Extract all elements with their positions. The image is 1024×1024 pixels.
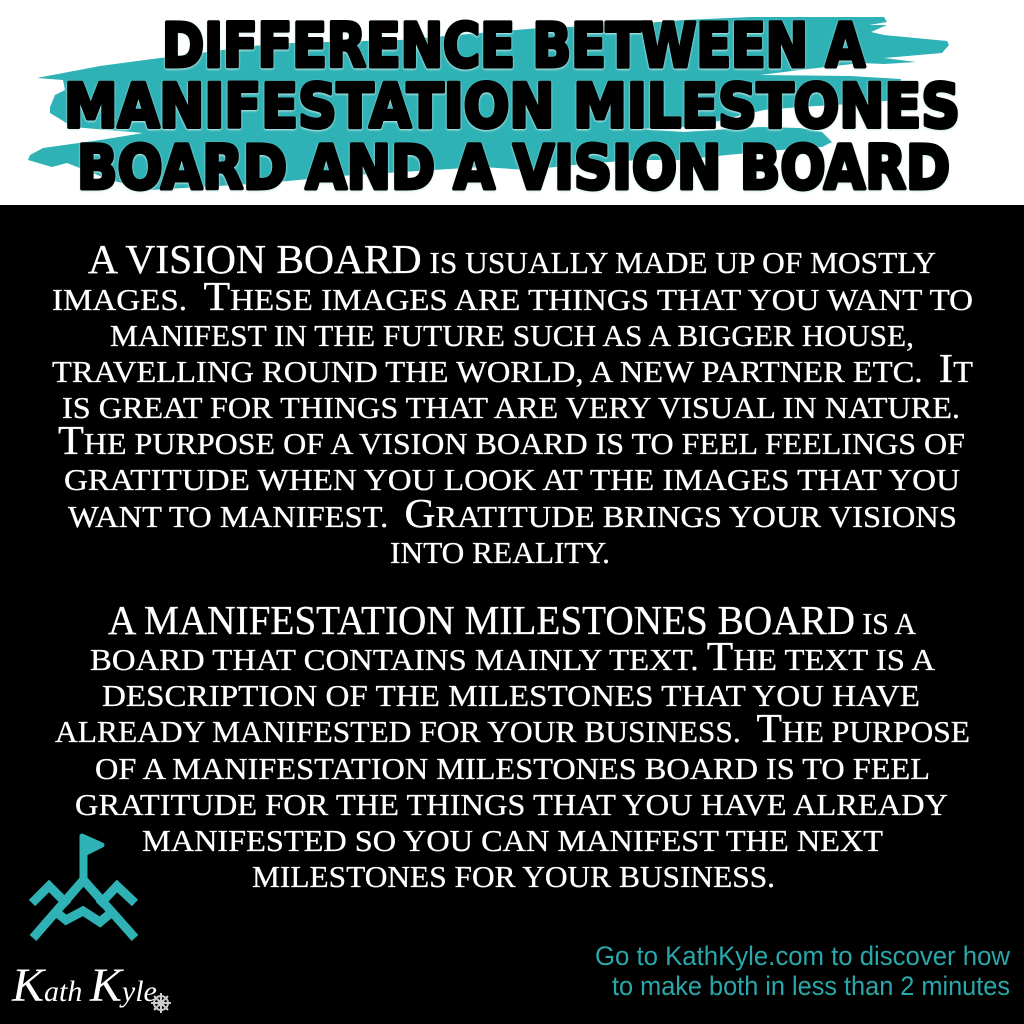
paragraph: manifestation milestones board: OF A MANIFESTATION MILESTONES BOARD IS TO FEEL — [95, 751, 930, 786]
paragraph: vision board: IMAGES. THESE IMAGES ARE THINGS THAT YOU WANT TO — [52, 273, 973, 319]
paragraph: manifestation milestones board: BOARD THAT CONTAINS MAINLY TEXT. THE TEXT IS A — [90, 633, 936, 679]
paragraph: vision board: GRATITUDE WHEN YOU LOOK AT THE IMAGES THAT YOU — [64, 462, 960, 497]
paragraph: vision board: MANIFEST IN THE FUTURE SUCH AS A BIGGER HOUSE, — [110, 318, 914, 353]
paragraph: vision board: IS GREAT FOR THINGS THAT ARE VERY VISUAL IN NATURE. — [62, 390, 960, 425]
paragraph: manifestation milestones board: GRATITUDE FOR THE THINGS THAT YOU HAVE ALREADY — [75, 787, 948, 822]
paragraph: manifestation milestones board: A MANIFESTATION MILESTONES BOARD IS A — [108, 597, 917, 643]
icon: snowflake mandala — [151, 993, 171, 1013]
paragraph: manifestation milestones board: MANIFESTED SO YOU CAN MANIFEST THE NEXT — [142, 823, 883, 858]
header panel — [0, 0, 1024, 206]
paragraph: vision board — [52, 236, 973, 570]
paragraph: manifestation milestones board: DESCRIPTION OF THE MILESTONES THAT YOU HAVE — [102, 678, 920, 713]
signature: Kath Kyle: Kath Kyle — [11, 959, 157, 1012]
black body panel — [0, 205, 1024, 1024]
title: DIFFERENCE BETWEEN A — [162, 10, 865, 82]
paragraph: vision board: A VISION BOARD IS USUALLY MADE UP OF MOSTLY — [88, 236, 936, 282]
icon: mountain with flag logo — [32, 836, 135, 938]
paragraph: manifestation milestones board: ALREADY MANIFESTED FOR YOUR BUSINESS. THE PURPOSE — [55, 705, 970, 751]
call to action — [595, 941, 1010, 1001]
call to action: Go to KathKyle.com to discover how — [595, 941, 1010, 971]
paragraph: vision board: WANT TO MANIFEST. GRATITUDE BRINGS YOUR VISIONS — [68, 490, 957, 536]
teal brush stroke — [28, 17, 949, 190]
title — [64, 10, 960, 204]
paragraph: vision board: THE PURPOSE OF A VISION BOARD IS TO FEEL FEELINGS OF — [58, 417, 965, 463]
paragraph: vision board: INTO REALITY. — [390, 535, 610, 570]
paragraph: manifestation milestones board — [55, 597, 970, 894]
paragraph: manifestation milestones board: MILESTONES FOR YOUR BUSINESS. — [252, 859, 775, 894]
paragraph: vision board: TRAVELLING ROUND THE WORLD, A NEW PARTNER ETC. IT — [52, 345, 973, 391]
